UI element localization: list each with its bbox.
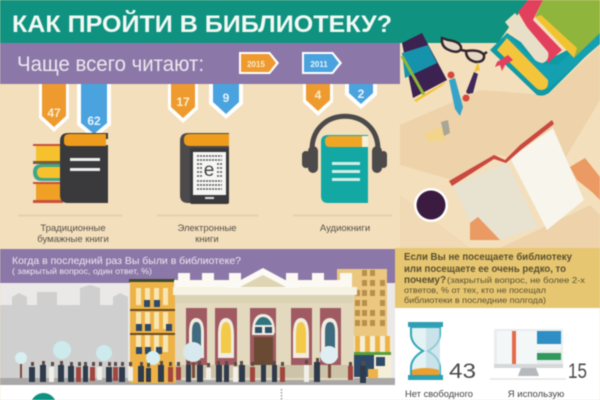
ribbon 9 electronic 2011 (209, 84, 243, 119)
question text: ответов, % от тех, кто не посещал (404, 286, 546, 295)
icon: audiobook with headphones (302, 116, 387, 203)
label: paper books: бумажные книги (37, 234, 109, 245)
subheading band (0, 43, 400, 84)
panel: non-visitor question (395, 248, 600, 308)
trees (15, 341, 338, 378)
question text: (закрытый вопрос, не более 2-х (447, 276, 585, 285)
illustration: desk with book stack (490, 0, 600, 96)
subheading: Чаще всего читают: (17, 53, 204, 76)
library building (173, 268, 357, 380)
question text: или посещаете ее очень редко, то (404, 264, 566, 275)
illustration: glasses (442, 38, 487, 62)
title: КАК ПРОЙТИ В БИБЛИОТЕКУ? (12, 10, 392, 38)
queue of people (29, 358, 366, 383)
panel: library visit section (0, 283, 395, 387)
icon: e-reader: e (204, 160, 214, 181)
legend tag 2015: 2015 (247, 60, 265, 69)
icon: stack of paper books (33, 133, 108, 203)
illustration: coffee cup (414, 188, 448, 222)
label: no free time: Нет свободного (405, 389, 473, 400)
ground (0, 378, 395, 385)
ribbon 4 audio 2015: 4 (315, 88, 322, 102)
ribbon 62 traditional 2011 (77, 84, 111, 139)
yellow building (129, 279, 176, 383)
question text: Если Вы не посещаете библиотеку (404, 251, 572, 263)
label: I use: Я использую (508, 389, 564, 400)
ribbon 2 audio 2011 (345, 84, 377, 109)
right tower building (337, 269, 391, 378)
illustration: sharpener (425, 120, 450, 142)
header band (0, 0, 528, 43)
panel: reasons background (395, 308, 600, 400)
ribbon 17 electronic 2015: 17 (176, 95, 190, 109)
legend tag 2011: 2011 (310, 60, 328, 69)
icon: e-reader (180, 133, 229, 204)
skyline (0, 285, 128, 378)
question: Когда в последний раз Вы были в библиотеке? (12, 255, 241, 267)
label: audiobooks: Аудиокниги (320, 223, 370, 234)
label: paper books: Традиционные (40, 223, 106, 234)
ribbon 17 electronic 2015 (168, 84, 198, 123)
illustration: pencils (448, 62, 480, 116)
ribbon 4 audio 2015 (303, 84, 333, 116)
icon: teal circle (32, 393, 55, 400)
stat 43: 43 (449, 360, 476, 383)
illustration: hands (470, 158, 600, 240)
label: e-books: книги (195, 234, 219, 245)
ribbon 47 traditional 2015 (39, 84, 69, 132)
illustration: closed notebook (402, 33, 447, 102)
question text: почему? (404, 275, 446, 286)
icon: hourglass (408, 322, 443, 380)
ribbon 47 traditional 2015: 47 (47, 106, 61, 120)
purple question band (0, 249, 395, 283)
illustration: open book (449, 120, 584, 240)
label: e-books: Электронные (177, 223, 237, 234)
legend tag 2015 (239, 52, 279, 74)
question: ( закрытый вопрос, один ответ, %) (12, 266, 152, 276)
question text: библиотеки в последние полгода) (404, 296, 546, 305)
icon: computer monitor (490, 329, 566, 379)
legend tag 2011 (302, 52, 342, 74)
ribbon 2 audio 2011: 2 (358, 87, 365, 101)
ribbon 62 traditional 2011: 62 (87, 114, 101, 128)
stat 15: 15 (568, 360, 587, 383)
ribbon 9 electronic 2011: 9 (223, 91, 230, 105)
